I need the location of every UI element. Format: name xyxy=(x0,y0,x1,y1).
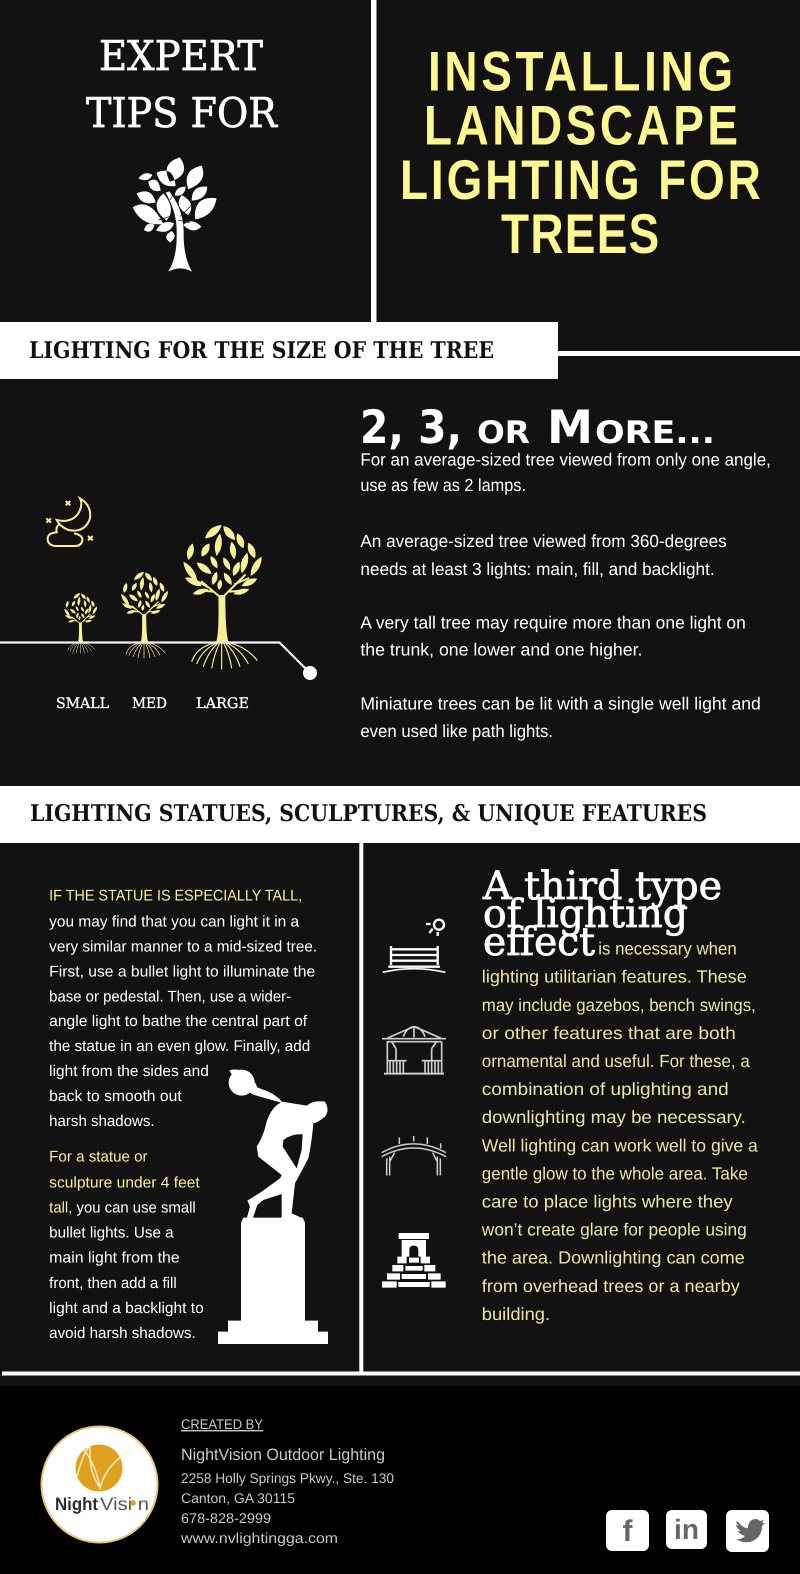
text block: utilitarian features: from overhead trees or a nearby xyxy=(482,1276,740,1296)
heading: 2, 3, or more: OR xyxy=(477,415,530,451)
footer text: created by and contact: 678-828-2999 xyxy=(181,1510,271,1526)
heading: a third type of lighting effect: A third type xyxy=(482,864,722,909)
size labels xyxy=(56,696,249,712)
heading: a third type of lighting effect: of lighting xyxy=(483,892,688,937)
text block: utilitarian features: lighting utilitarian features. These xyxy=(482,967,747,987)
text block: utilitarian features: won’t create glare for people using xyxy=(481,1220,747,1240)
title: installing landscape lighting for trees: TREES xyxy=(501,202,659,265)
title: installing landscape lighting for trees: INSTALLING xyxy=(428,40,733,102)
text block: utilitarian features: may include gazebos, bench swings, xyxy=(482,995,756,1015)
text block: tall statue advice: back to smooth out xyxy=(49,1088,182,1105)
text block: lamp counts xyxy=(360,450,771,741)
text block: lamp counts: An average-sized tree viewed from 360-degrees xyxy=(360,531,727,551)
heading: 2, 3, or more: ORE... xyxy=(595,415,715,451)
icon: garden arch xyxy=(382,1136,446,1175)
heading: expert tips for xyxy=(86,32,278,137)
footer text: created by and contact: NightVision Outdoor Lighting xyxy=(181,1446,385,1464)
text block: utilitarian features xyxy=(481,939,758,1324)
size labels: LARGE xyxy=(196,696,249,712)
size labels: SMALL xyxy=(56,696,109,712)
text block: tall statue advice: the statue in an even glow. Finally, add xyxy=(49,1038,310,1055)
text block: lamp counts: needs at least 3 lights: main, fill, and backlight. xyxy=(360,559,715,579)
text block: small statue advice: main light from the xyxy=(49,1250,180,1267)
tree: large xyxy=(183,525,262,669)
text block: utilitarian features: the area. Downlighting can come xyxy=(482,1248,745,1268)
text block: utilitarian features: or other features that are both xyxy=(482,1023,736,1043)
icon: linkedin: in xyxy=(674,1514,699,1545)
footer text: created by and contact xyxy=(180,1416,394,1547)
icon: moon and cloud xyxy=(46,498,93,546)
heading: 2, 3, or more xyxy=(360,400,715,454)
text block: utilitarian features: gentle glow to the whole area. Take xyxy=(482,1163,748,1183)
text block: small statue advice: light and a backlight to xyxy=(49,1300,204,1317)
text block: lamp counts: even used like path lights. xyxy=(360,721,553,741)
ground line with node xyxy=(0,642,317,680)
text block: tall statue advice: very similar manner to a mid-sized tree. xyxy=(49,939,317,956)
icon: gazebo xyxy=(382,1027,446,1074)
text block: tall statue advice: harsh shadows. xyxy=(49,1113,155,1130)
footer text: created by and contact: Canton, GA 30115 xyxy=(181,1490,295,1506)
text block: small statue advice: sculpture under 4 feet xyxy=(49,1174,200,1191)
text block: tall statue advice: base or pedestal. Then, use a wider- xyxy=(49,989,291,1006)
icon: facebook: f xyxy=(622,1515,634,1548)
text block: small statue advice xyxy=(49,1148,204,1342)
text block: small statue advice: For a statue or xyxy=(49,1148,148,1165)
text block: tall statue advice: IF THE STATUE IS ESPECIALLY TALL, xyxy=(49,887,302,904)
banner: lighting for the size of the tree: LIGHTING FOR THE SIZE OF THE TREE xyxy=(29,337,494,364)
text block: tall statue advice: you may find that you can light it in a xyxy=(49,913,300,930)
size labels: MED xyxy=(132,696,167,712)
text block: tall statue advice: angle light to bathe the central part of xyxy=(49,1013,308,1030)
text block: utilitarian features: care to place lights where they xyxy=(482,1191,733,1212)
text block: utilitarian features: ornamental and useful. For these, a xyxy=(482,1051,750,1071)
text block: lamp counts: the trunk, one lower and one higher. xyxy=(360,639,642,659)
footer text: created by and contact: www.nvlightingga.com xyxy=(180,1531,338,1547)
chart: tree sizes on ground line xyxy=(0,525,317,712)
text block: small statue advice: avoid harsh shadows. xyxy=(49,1325,196,1342)
banner: lighting statues, sculptures, and unique features xyxy=(0,786,800,843)
banner: lighting statues, sculptures, and unique features: LIGHTING STATUES, SCULPTURES, & UNIQUE FEATURES xyxy=(30,800,707,827)
panel dividers: statues section xyxy=(2,843,800,1376)
tree: medium xyxy=(121,572,168,659)
title: installing landscape lighting for trees xyxy=(400,40,761,265)
tree: small xyxy=(64,593,97,654)
logo: NightVision xyxy=(42,1426,158,1542)
title: installing landscape lighting for trees: LANDSCAPE xyxy=(424,94,738,156)
text block: tall statue advice: light from the sides and xyxy=(49,1063,209,1080)
heading: a third type of lighting effect xyxy=(482,864,722,965)
icon: white leafy tree xyxy=(133,157,217,272)
banner: lighting for the size of the tree xyxy=(0,322,558,379)
panel: header dividers xyxy=(371,0,800,356)
heading: a third type of lighting effect: effect xyxy=(483,920,595,965)
footer text: created by and contact: CREATED BY xyxy=(181,1416,264,1432)
text block: tall statue advice: First, use a bullet light to illuminate the xyxy=(49,964,315,981)
text block: utilitarian features: Well lighting can work well to give a xyxy=(482,1135,758,1155)
text block: small statue advice: tall, you can use small xyxy=(49,1199,196,1217)
icon: stepped temple xyxy=(382,1233,446,1288)
footer panel xyxy=(0,1386,800,1574)
text block: utilitarian features: downlighting may be necessary. xyxy=(482,1107,746,1127)
icon: linkedin xyxy=(666,1510,707,1549)
text block: utilitarian features: combination of uplighting and xyxy=(482,1079,729,1099)
text block: utilitarian features: is necessary when xyxy=(598,939,737,959)
heading: expert tips for: EXPERT xyxy=(99,32,263,80)
icon: discus thrower statue xyxy=(218,1069,328,1344)
footer text: created by and contact: 2258 Holly Springs Pkwy., Ste. 130 xyxy=(181,1470,394,1486)
icon: twitter xyxy=(726,1510,769,1552)
text block: small statue advice: front, then add a fill xyxy=(49,1275,177,1292)
text block: small statue advice: bullet lights. Use a xyxy=(49,1225,174,1242)
text block: utilitarian features: building. xyxy=(482,1304,550,1324)
logo: NightVision: Night xyxy=(55,1494,98,1514)
icon: facebook xyxy=(606,1510,649,1551)
logo: NightVision: Visi n xyxy=(100,1494,149,1514)
text block: lamp counts: use as few as 2 lamps. xyxy=(360,475,526,495)
title: installing landscape lighting for trees: LIGHTING FOR xyxy=(400,148,761,211)
text block: lamp counts: For an average-sized tree viewed from only one angle, xyxy=(360,450,771,470)
heading: expert tips for: TIPS FOR xyxy=(86,89,278,137)
text block: tall statue advice xyxy=(49,887,317,1130)
heading: 2, 3, or more: 2, 3, xyxy=(360,400,462,454)
text block: lamp counts: A very tall tree may require more than one light on xyxy=(360,612,746,632)
icon: bench with lamp xyxy=(383,920,445,972)
text block: lamp counts: Miniature trees can be lit with a single well light and xyxy=(360,694,761,714)
heading: 2, 3, or more: M xyxy=(547,400,593,454)
